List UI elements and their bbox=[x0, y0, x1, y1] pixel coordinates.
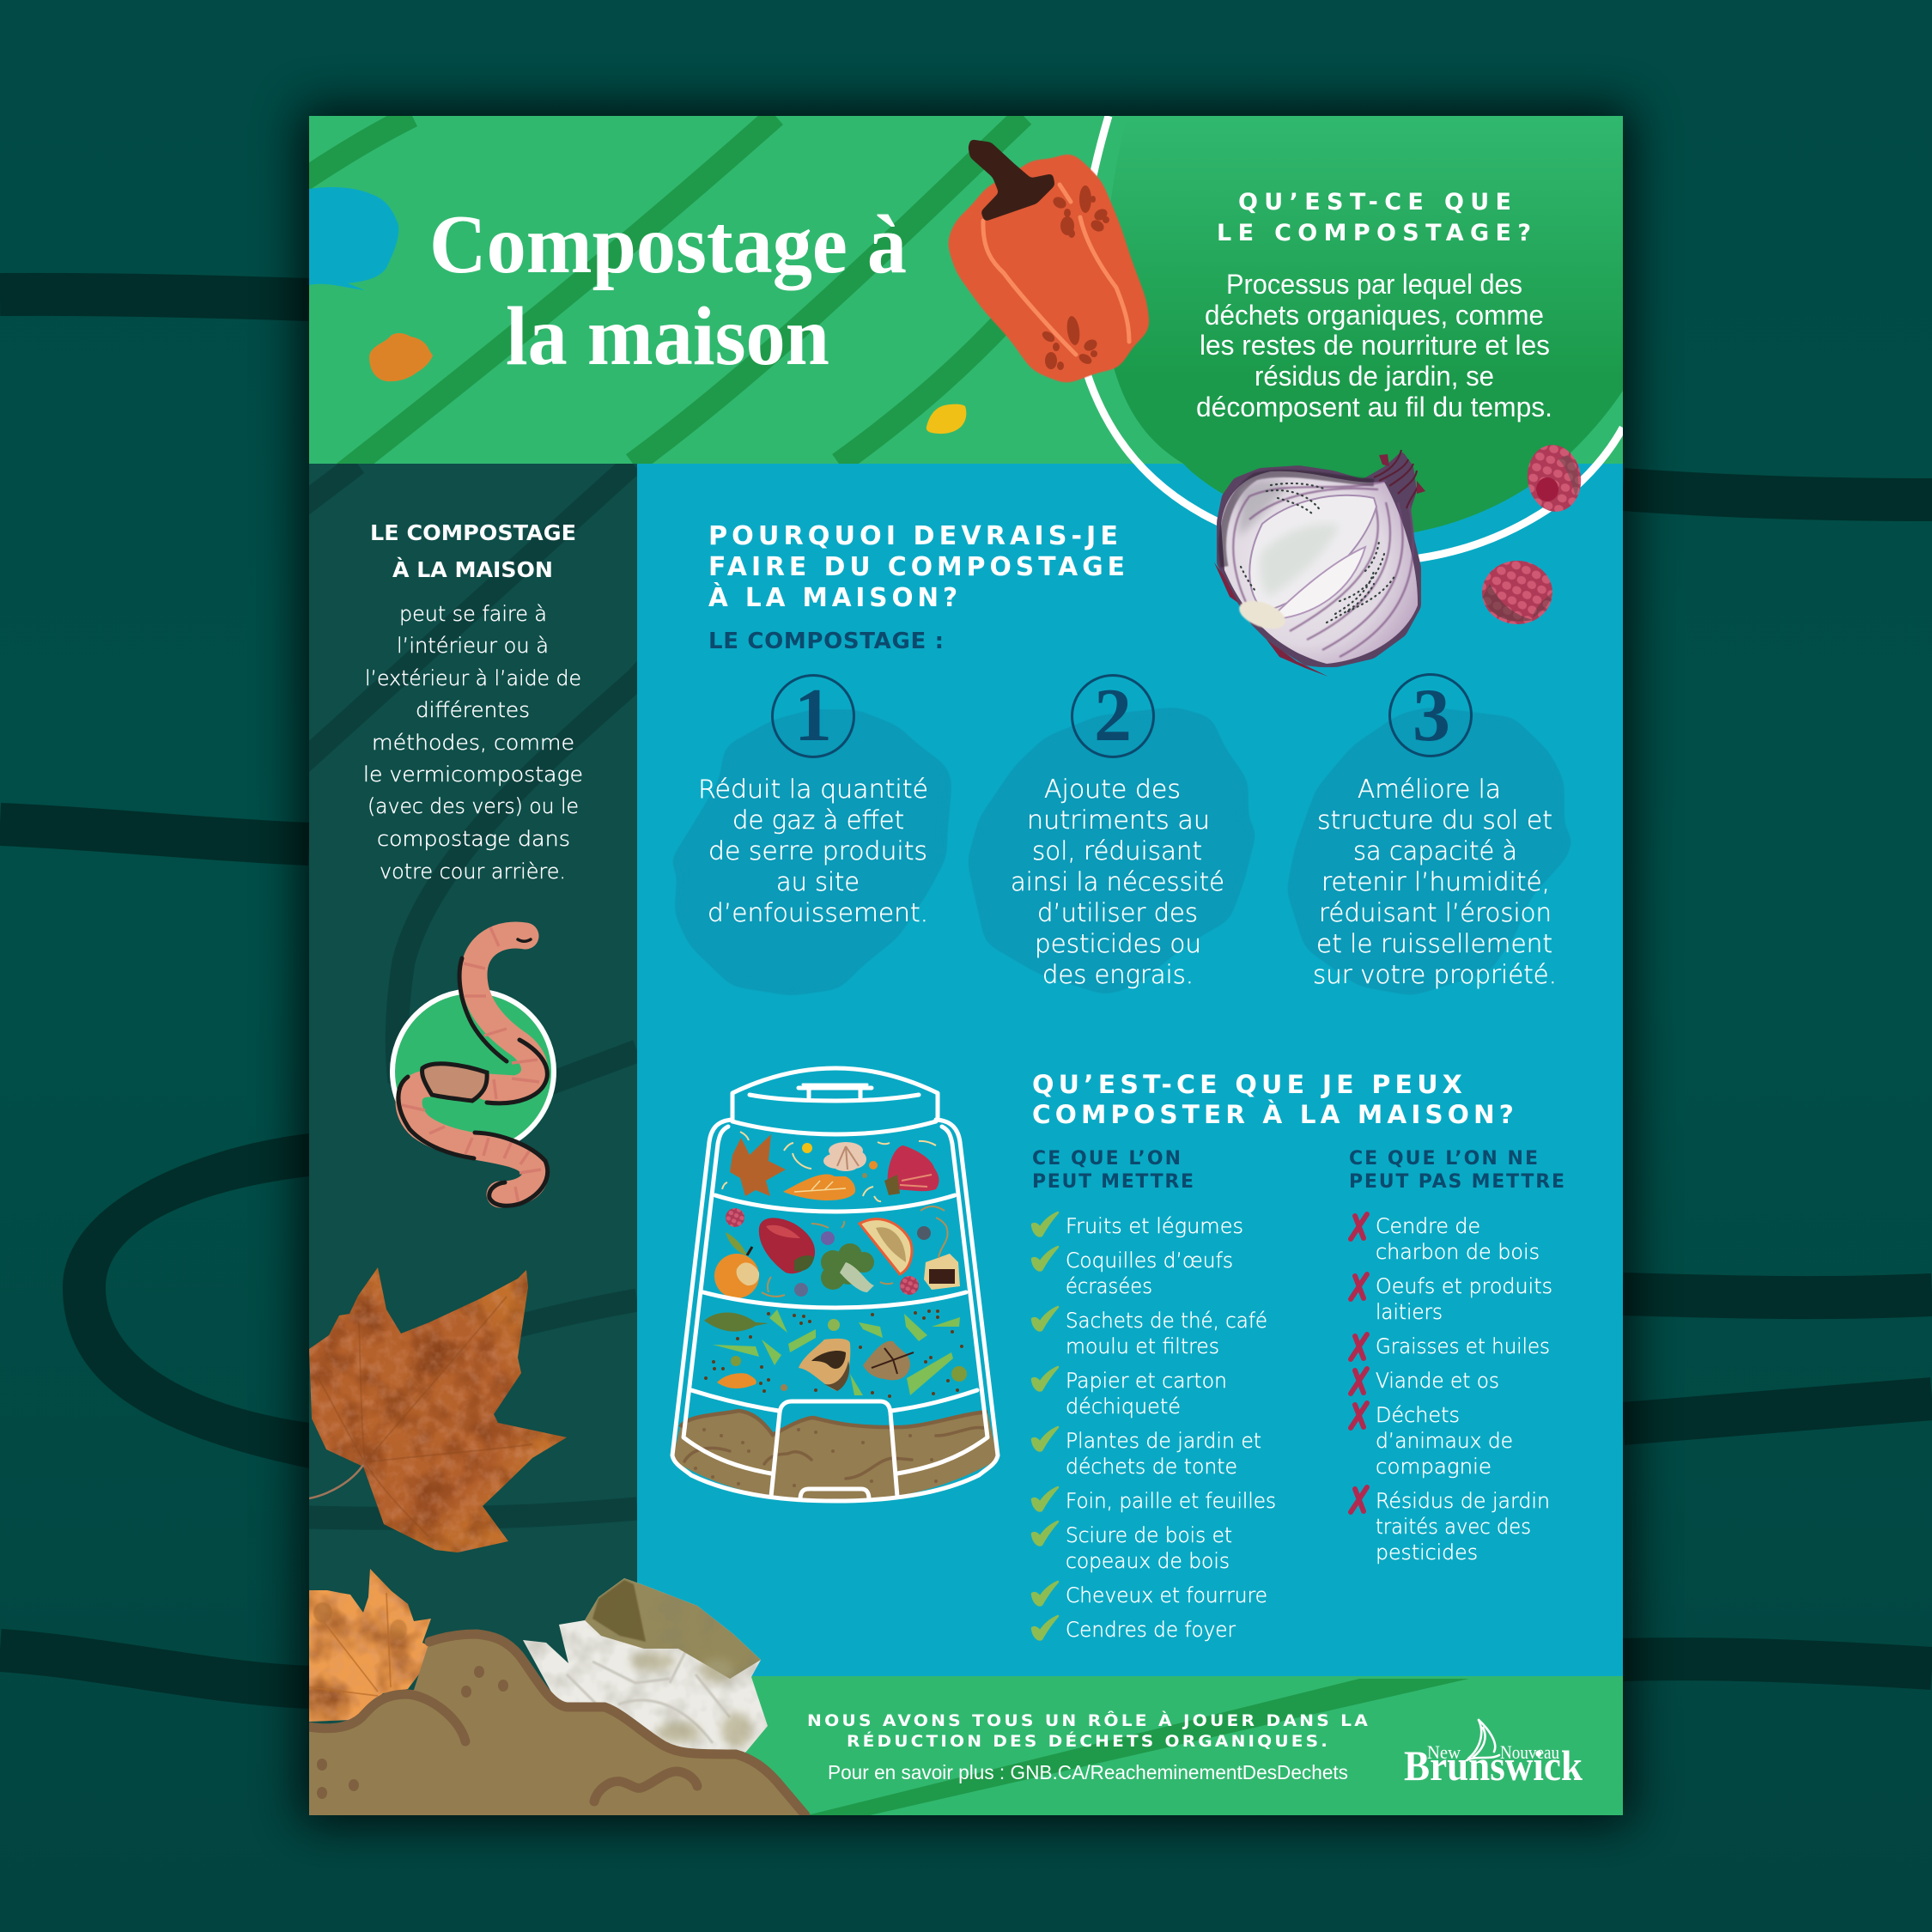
text: definition bbox=[1196, 269, 1552, 422]
forbidden list: Oeufs et produits bbox=[1376, 1274, 1552, 1298]
forbidden list: d’animaux de bbox=[1376, 1429, 1513, 1453]
text: definition: déchets organiques, comme bbox=[1205, 300, 1544, 331]
small orange leaf bbox=[309, 1569, 434, 1722]
benefit 3: Améliore la bbox=[1358, 775, 1501, 804]
benefit 2: pesticides ou bbox=[1035, 929, 1201, 958]
left column paragraph: l’intérieur ou à bbox=[397, 634, 549, 658]
benefit 3: 3 bbox=[1413, 674, 1450, 757]
poster bbox=[301, 116, 1623, 1815]
heading: what is composting: LE COMPOSTAGE? bbox=[1217, 220, 1531, 246]
forbidden list: Viande et os bbox=[1376, 1369, 1499, 1393]
left column paragraph: le vermicompostage bbox=[363, 762, 583, 787]
left column bands bbox=[309, 464, 637, 1530]
middle layer contents bbox=[714, 1206, 960, 1298]
left column paragraph: l’extérieur à l’aide de bbox=[365, 666, 581, 690]
left column heading: À LA MAISON bbox=[392, 557, 553, 582]
allowed list: Sciure de bois et bbox=[1066, 1523, 1232, 1547]
allowed list: Cheveux et fourrure bbox=[1066, 1583, 1267, 1607]
allowed list: écrasées bbox=[1066, 1274, 1152, 1298]
forbidden list bbox=[1376, 1214, 1552, 1564]
why heading bbox=[708, 521, 1129, 613]
forbidden list: Déchets bbox=[1376, 1403, 1460, 1427]
forbidden list: traités avec des bbox=[1376, 1515, 1531, 1539]
why heading: POURQUOI DEVRAIS-JE bbox=[708, 521, 1122, 551]
lower layer contents bbox=[704, 1309, 967, 1398]
poster shadow bbox=[301, 107, 1631, 1824]
check marks bbox=[1032, 1212, 1058, 1639]
left column paragraph: différentes bbox=[416, 698, 530, 722]
subheading: forbidden bbox=[1349, 1148, 1564, 1193]
New Brunswick logo: Brunswick bbox=[1404, 1741, 1583, 1789]
left column text bbox=[363, 520, 583, 884]
forbidden list: Cendre de bbox=[1376, 1214, 1480, 1238]
heading: what is composting bbox=[1218, 192, 1530, 240]
subheading: forbidden: CE QUE L’ON NE bbox=[1349, 1148, 1538, 1170]
footer message: NOUS AVONS TOUS UN RÔLE À JOUER DANS LA bbox=[807, 1710, 1370, 1730]
benefit 2: sol, réduisant bbox=[1032, 836, 1202, 866]
left column panel bbox=[309, 464, 637, 1815]
New Brunswick logo bbox=[1404, 1720, 1583, 1789]
benefit 1 bbox=[670, 674, 951, 994]
raspberry: lower bbox=[1482, 561, 1552, 624]
benefit 1: 1 bbox=[794, 674, 832, 757]
left column paragraph: compostage dans bbox=[377, 827, 570, 851]
paint blob: yellow bbox=[927, 404, 966, 434]
allowed list: moulu et filtres bbox=[1066, 1334, 1219, 1358]
paint blob: blue bbox=[309, 187, 398, 290]
soil mound bbox=[309, 1634, 809, 1815]
pepper illustration bbox=[946, 142, 1151, 385]
text: definition: Processus par lequel des bbox=[1226, 269, 1522, 300]
benefit 2: nutriments au bbox=[1027, 805, 1210, 835]
benefit 1: au site bbox=[776, 867, 860, 896]
paint blob: orange bbox=[369, 333, 433, 381]
forbidden list: compagnie bbox=[1376, 1455, 1492, 1479]
left column paragraph: peut se faire à bbox=[399, 602, 547, 626]
subheading: le compostage: LE COMPOSTAGE : bbox=[708, 629, 944, 654]
left column heading bbox=[372, 524, 575, 577]
title bbox=[433, 215, 906, 365]
heading: what can I compost: COMPOSTER À LA MAISON? bbox=[1032, 1100, 1518, 1129]
benefit 2: d’utiliser des bbox=[1037, 898, 1198, 927]
footer link: Pour en savoir plus : GNB.CA/ReacheminementDesDechets bbox=[828, 1761, 1348, 1783]
soil bbox=[672, 1411, 998, 1501]
subheading: forbidden: PEUT PAS METTRE bbox=[1349, 1171, 1564, 1193]
allowed list: copeaux de bois bbox=[1066, 1549, 1230, 1573]
allowed list: Sachets de thé, café bbox=[1066, 1309, 1267, 1333]
header band bbox=[309, 116, 1623, 464]
text: definition: résidus de jardin, se bbox=[1255, 361, 1494, 392]
benefit 2: ainsi la nécessité bbox=[1011, 867, 1224, 896]
allowed list: Plantes de jardin et bbox=[1066, 1429, 1261, 1453]
left column paragraph bbox=[363, 602, 583, 884]
why heading: À LA MAISON? bbox=[708, 582, 962, 613]
allowed list: déchiqueté bbox=[1066, 1394, 1181, 1419]
benefit 3: réduisant l’érosion bbox=[1319, 898, 1552, 927]
New Brunswick logo: Nouveau bbox=[1500, 1741, 1559, 1763]
bin outline bbox=[672, 1068, 998, 1501]
benefit 3: et le ruissellement bbox=[1316, 929, 1552, 958]
crumpled tissue bbox=[523, 1578, 768, 1769]
footer band bbox=[745, 1676, 1623, 1815]
forbidden list: Résidus de jardin bbox=[1376, 1489, 1550, 1513]
left column paragraph: votre cour arrière. bbox=[380, 860, 566, 884]
large brown maple leaf bbox=[309, 1267, 567, 1552]
benefit 1: Réduit la quantité bbox=[698, 775, 928, 804]
forbidden list: charbon de bois bbox=[1376, 1240, 1540, 1264]
main blue panel bbox=[637, 464, 1623, 1676]
heading: what can I compost bbox=[1032, 1070, 1518, 1129]
raspberry: top bbox=[1527, 445, 1582, 512]
New Brunswick logo: New bbox=[1427, 1741, 1461, 1763]
footer message: RÉDUCTION DES DÉCHETS ORGANIQUES. bbox=[847, 1731, 1330, 1751]
subheading: allowed bbox=[1032, 1148, 1194, 1193]
benefit 3 bbox=[1288, 674, 1572, 994]
title: la maison bbox=[506, 290, 829, 383]
subheading: allowed: CE QUE L’ON bbox=[1032, 1148, 1181, 1170]
forbidden list: Graisses et huiles bbox=[1376, 1334, 1550, 1358]
text: definition: décomposent au fil du temps. bbox=[1196, 392, 1552, 422]
white ring bbox=[1078, 116, 1623, 559]
column: forbidden items bbox=[1349, 1148, 1564, 1564]
benefit 2 bbox=[969, 674, 1255, 993]
benefit 1: de serre produits bbox=[708, 836, 927, 866]
text: definition: les restes de nourriture et les bbox=[1200, 330, 1550, 361]
allowed list: Cendres de foyer bbox=[1066, 1618, 1236, 1642]
decorative dark green circle bbox=[1111, 174, 1623, 532]
left column heading: LE COMPOSTAGE bbox=[370, 520, 576, 545]
benefit 3: sa capacité à bbox=[1353, 836, 1517, 866]
allowed list: déchets de tonte bbox=[1066, 1455, 1237, 1479]
compost bin illustration bbox=[672, 1068, 998, 1501]
benefit 3: structure du sol et bbox=[1317, 805, 1552, 835]
left column paragraph: (avec des vers) ou le bbox=[368, 794, 579, 818]
heading: what can I compost: QU’EST-CE QUE JE PEUX bbox=[1032, 1070, 1467, 1099]
left column paragraph: méthodes, comme bbox=[372, 731, 574, 755]
benefit 2: des engrais. bbox=[1042, 960, 1194, 989]
forbidden list: laitiers bbox=[1376, 1300, 1443, 1324]
heading: what is composting: QU’EST-CE QUE bbox=[1238, 189, 1511, 216]
title: Compostage à bbox=[429, 198, 907, 291]
benefit 1: d’enfouissement. bbox=[708, 898, 928, 927]
forbidden list: pesticides bbox=[1376, 1540, 1478, 1564]
why heading: FAIRE DU COMPOSTAGE bbox=[708, 552, 1129, 582]
benefit 2: 2 bbox=[1094, 674, 1132, 757]
benefit 3: retenir l’humidité, bbox=[1321, 867, 1550, 896]
allowed list: Coquilles d’œufs bbox=[1066, 1249, 1233, 1273]
worm illustration bbox=[392, 927, 554, 1206]
subheading: allowed: PEUT METTRE bbox=[1032, 1171, 1194, 1193]
benefit 3: sur votre propriété. bbox=[1313, 960, 1557, 989]
cross marks bbox=[1351, 1214, 1367, 1512]
allowed list: Foin, paille et feuilles bbox=[1066, 1489, 1276, 1513]
background swooshes bbox=[0, 295, 1932, 1687]
benefit 2: Ajoute des bbox=[1044, 775, 1181, 804]
column: allowed items bbox=[1032, 1148, 1276, 1642]
header stripes bbox=[309, 116, 1032, 464]
onion illustration bbox=[1214, 450, 1425, 677]
allowed list: Papier et carton bbox=[1066, 1369, 1227, 1393]
allowed list bbox=[1066, 1214, 1276, 1642]
allowed list: Fruits et légumes bbox=[1066, 1214, 1243, 1238]
footer message bbox=[807, 1710, 1370, 1751]
top layer contents bbox=[722, 1132, 939, 1201]
benefit 1: de gaz à effet bbox=[732, 805, 904, 835]
